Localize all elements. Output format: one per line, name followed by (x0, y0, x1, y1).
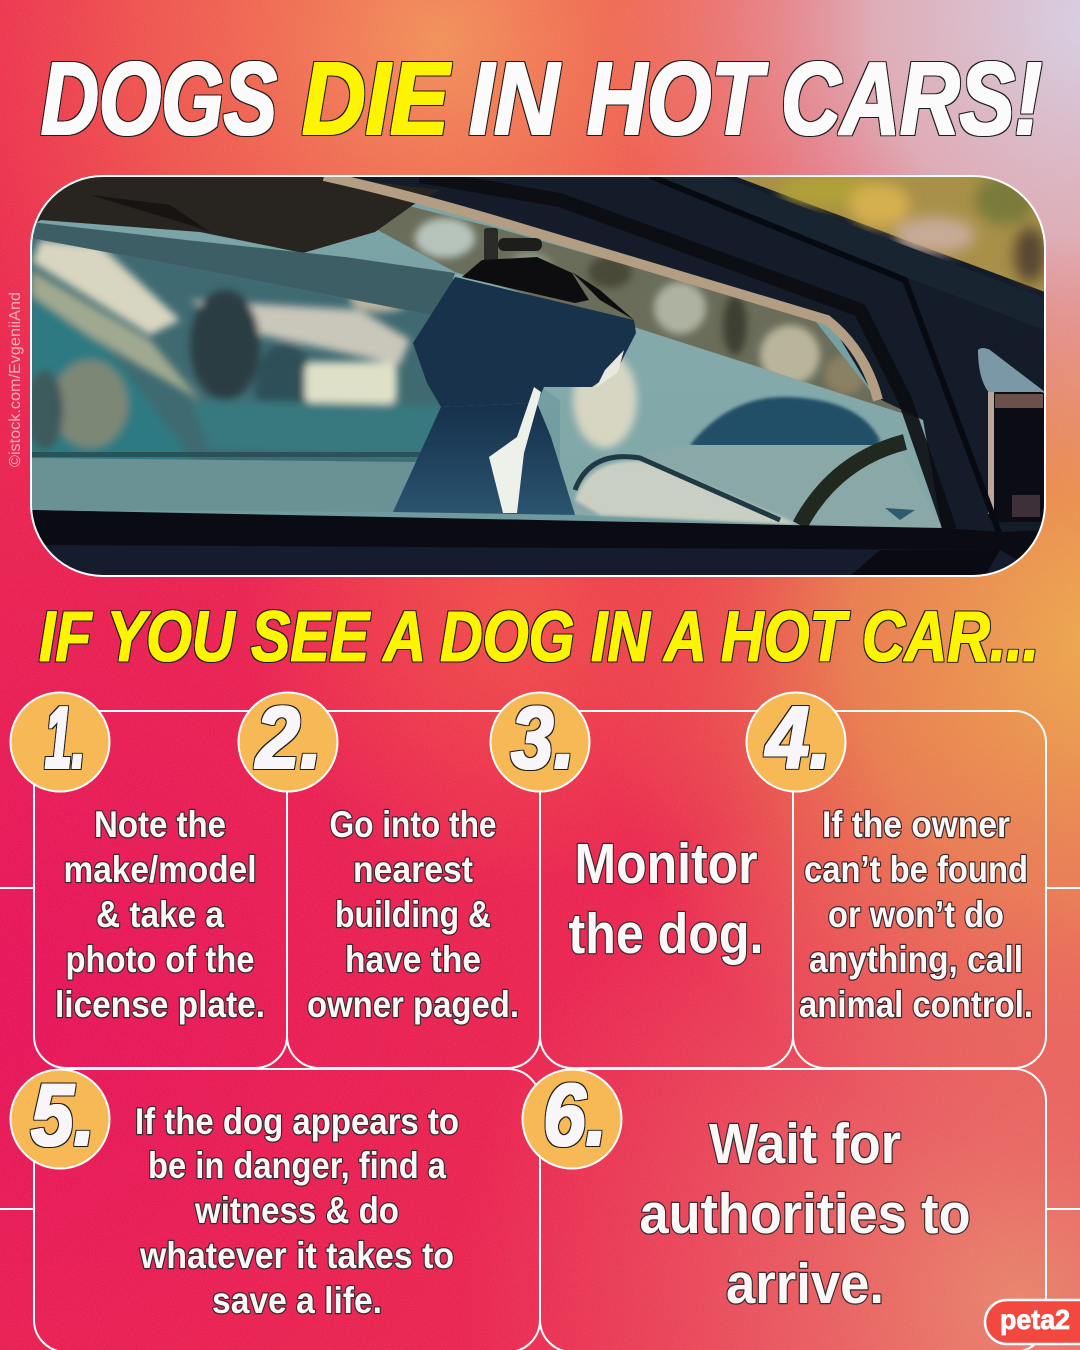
number badge 2: 2. (254, 688, 322, 787)
window edge band (31, 222, 455, 317)
panel 4: call animal control: anything, call (809, 939, 1023, 980)
panel 3: monitor the dog: Monitor (574, 832, 758, 896)
trees and rocks through far window (370, 200, 930, 425)
side ticks (0, 888, 1080, 1209)
title: DOGS (41, 41, 277, 156)
panel 1: note make and model: make/model (64, 849, 256, 890)
panel 5: find a witness (34, 1069, 540, 1350)
dog (393, 257, 636, 515)
peta2 logo: peta2 (1000, 1304, 1070, 1335)
title: HOT (587, 41, 769, 156)
panel 1: note make and model: photo of the (66, 939, 254, 980)
number badge 6: 6. (543, 1065, 607, 1164)
door sill (32, 510, 1039, 560)
number badge 4: 4. (764, 688, 831, 787)
foliage outside the car (736, 177, 1044, 292)
panel 5: find a witness: If the dog appears to (135, 1101, 459, 1142)
panel 4: call animal control: can’t be found (804, 849, 1028, 890)
number badge 3: 3. (511, 688, 575, 787)
panel 4: call animal control: animal control. (799, 984, 1033, 1025)
panel 6: wait for authorities (540, 1069, 1046, 1350)
interior (31, 176, 942, 530)
panel 3: monitor the dog: the dog. (568, 902, 764, 966)
panel 2: have owner paged: have the (345, 939, 481, 980)
mirror mount (484, 228, 542, 260)
photo border (31, 176, 1045, 576)
panel 1: note make and model (34, 711, 287, 1068)
panel 5: find a witness: witness & do (194, 1190, 399, 1231)
number badge 5: 5. (31, 1065, 95, 1164)
title: IN (469, 41, 561, 156)
panel 6: wait for authorities: arrive. (726, 1252, 884, 1316)
number badge 1 (10, 688, 110, 792)
tan window trim (324, 176, 878, 400)
seat and dashboard (573, 352, 942, 530)
door panel (31, 458, 420, 512)
panel 6: wait for authorities: authorities to (640, 1182, 970, 1246)
panel 3: monitor the dog (540, 711, 793, 1068)
panel 5: find a witness: save a life. (212, 1280, 382, 1321)
peta2 logo (985, 1300, 1080, 1344)
panel 4: call animal control: or won’t do (828, 894, 1004, 935)
panel 1: note make and model: & take a (96, 894, 224, 935)
panel 2: have owner paged (287, 711, 540, 1068)
panel 2: have owner paged: Go into the (330, 804, 496, 845)
panel 5: find a witness: whatever it takes to (139, 1235, 454, 1276)
blurred parking lot scene on left (27, 238, 441, 470)
panel 2: have owner paged: owner paged. (307, 984, 519, 1025)
photo: dog in a car window (27, 174, 1048, 576)
title: DIE (302, 41, 452, 156)
title (41, 41, 1042, 156)
panel 5: find a witness: be in danger, find a (148, 1145, 446, 1186)
panel 4: call animal control: If the owner (822, 804, 1010, 845)
panel 2: have owner paged: nearest (353, 849, 473, 890)
panel 2: have owner paged: building & (335, 894, 491, 935)
panel 1: note make and model: license plate. (55, 984, 265, 1025)
number badge 1: 1. (45, 688, 85, 787)
panel 4: call animal control (793, 711, 1046, 1068)
rear window and wing mirror (978, 348, 1048, 522)
headliner (31, 176, 440, 253)
photo credit: ©istock.com/EvgeniiAnd (7, 292, 24, 467)
panel 1: note make and model: Note the (94, 804, 226, 845)
panel 6: wait for authorities: Wait for (709, 1112, 901, 1176)
